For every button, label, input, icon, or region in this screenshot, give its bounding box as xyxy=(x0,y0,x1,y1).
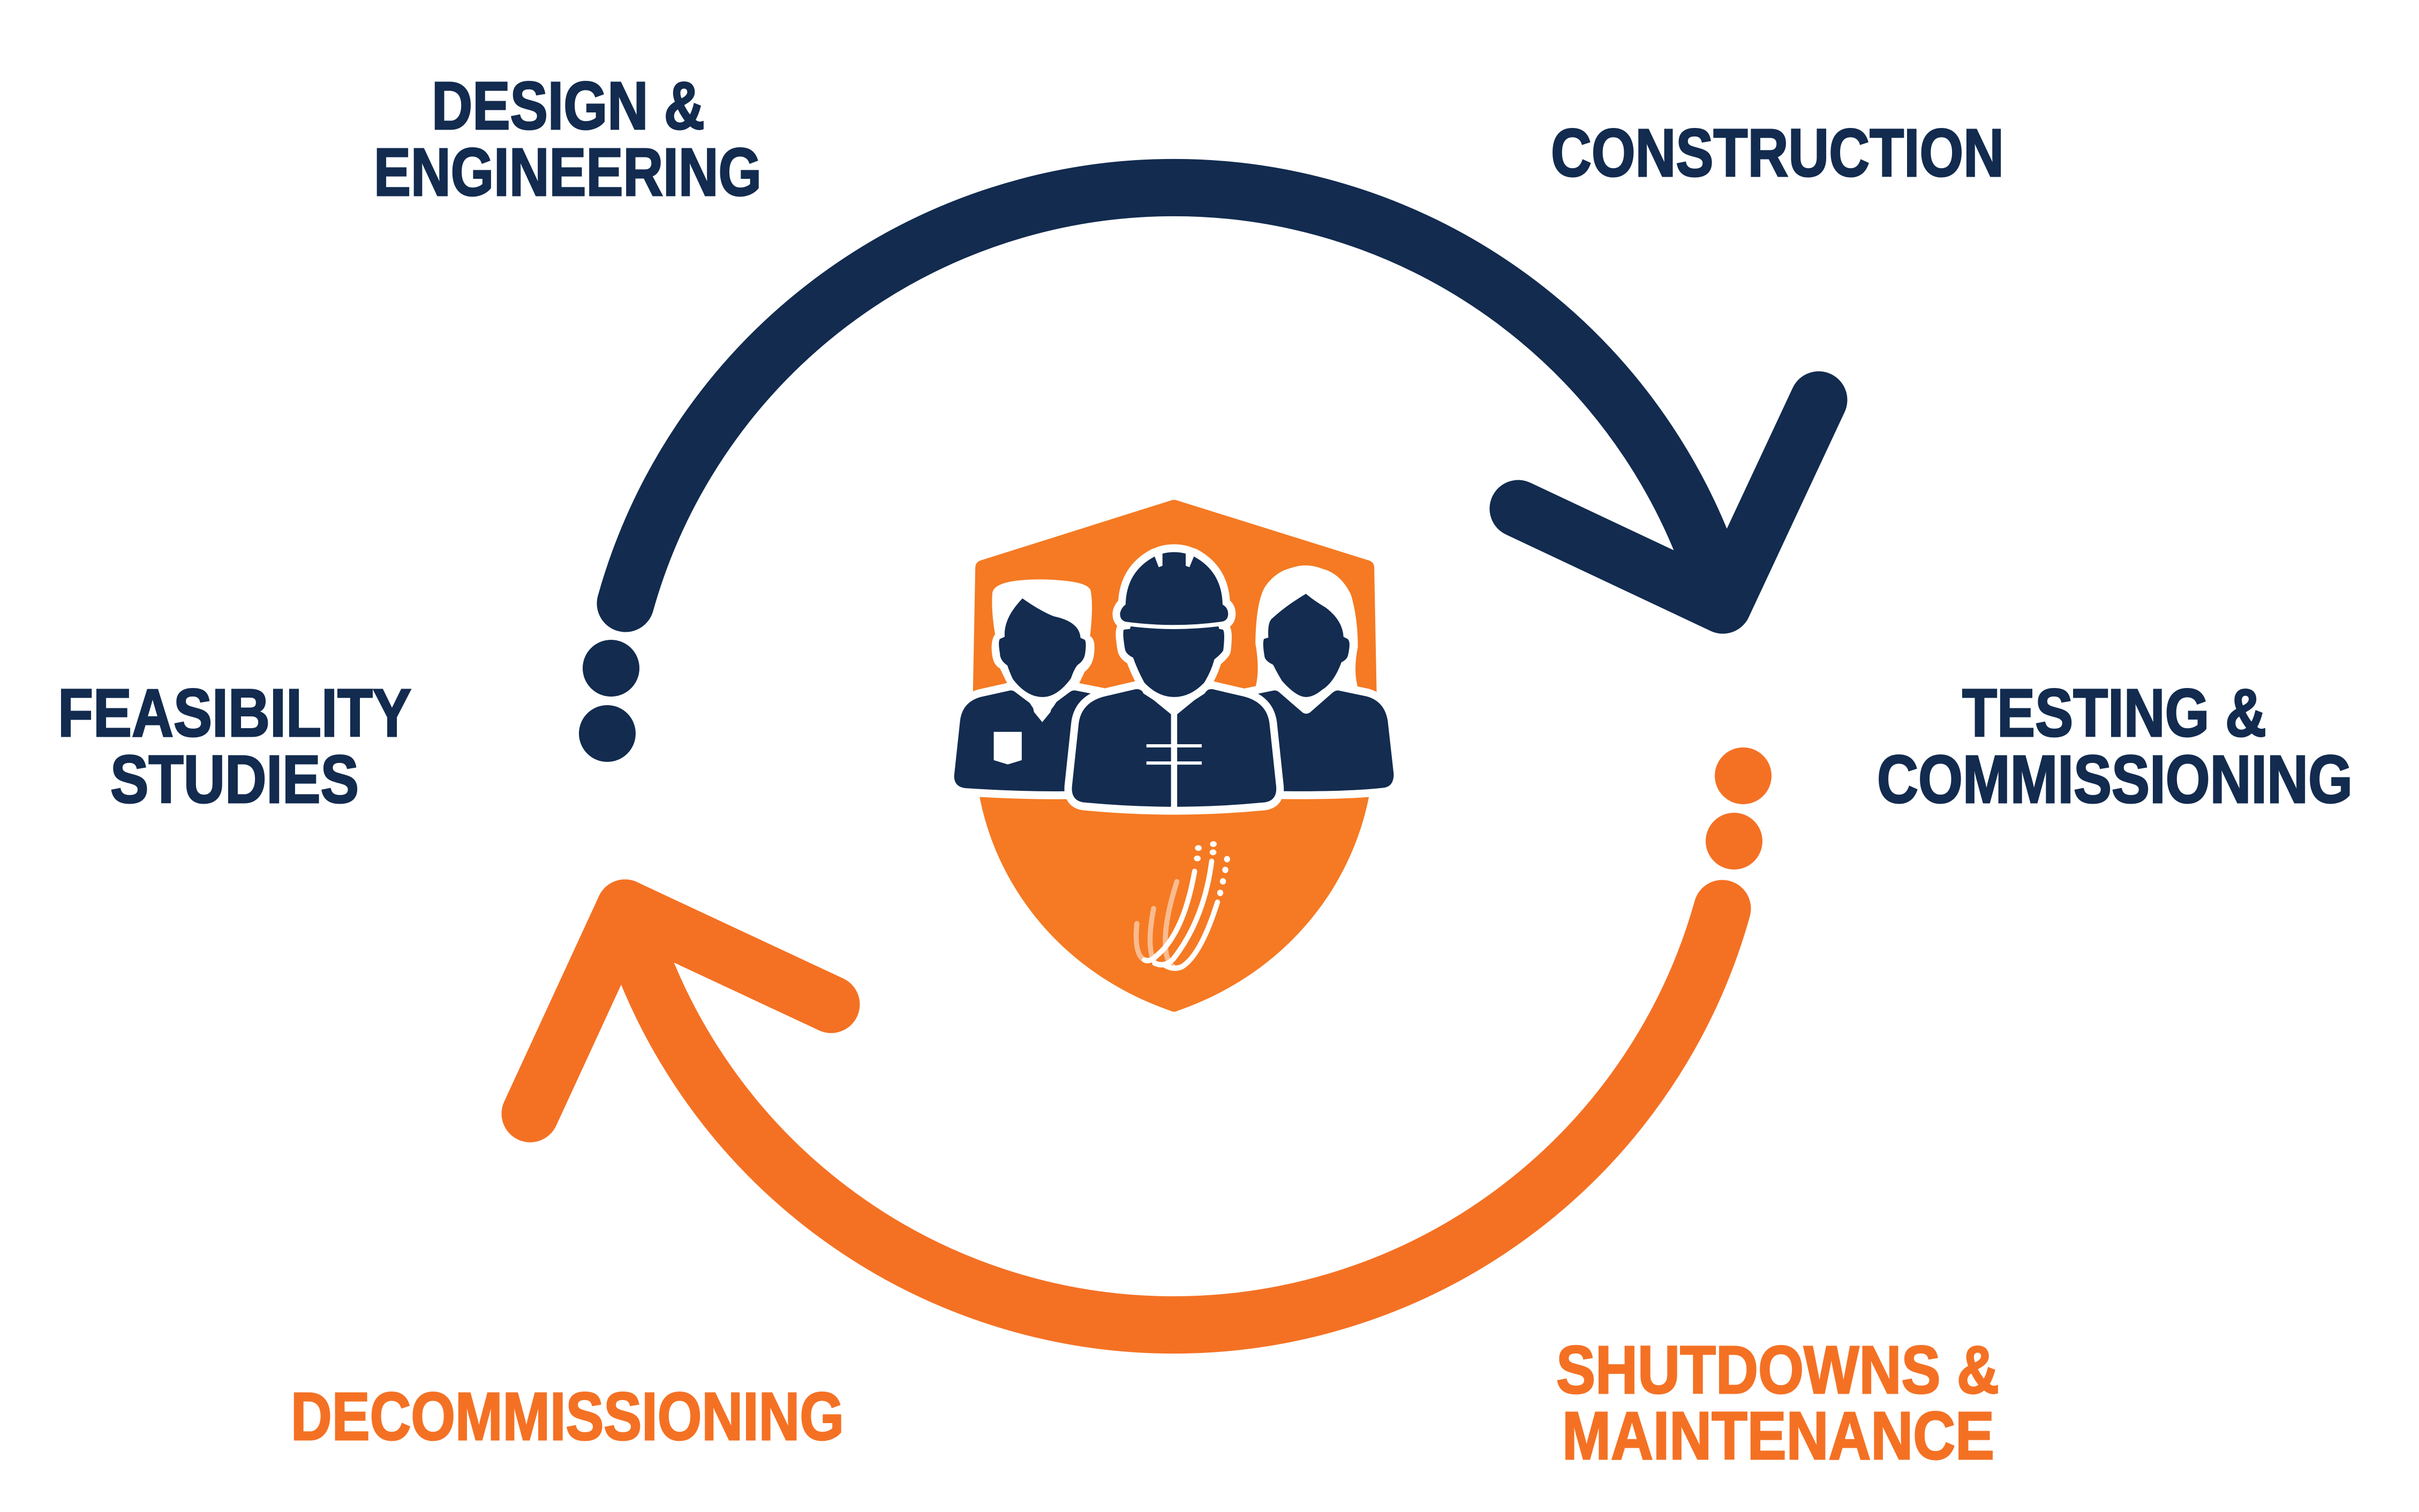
label: Testing & Commissioning xyxy=(1877,675,2353,817)
label: Feasibility Studies: FEASIBILITY xyxy=(58,675,411,751)
label: Shutdowns & Maintenance: MAINTENANCE xyxy=(1562,1398,1994,1473)
central shield emblem with workers xyxy=(954,500,1393,1012)
white halo behind head and hat xyxy=(1120,552,1228,697)
worker: left person xyxy=(954,579,1102,791)
label: Construction: CONSTRUCTION xyxy=(1551,115,2004,191)
arrow: navy upper cycle arrow xyxy=(626,187,1819,605)
navy dots xyxy=(579,640,639,762)
worker: right person xyxy=(1245,565,1393,791)
jacket zip and straps xyxy=(1147,746,1202,763)
label: Feasibility Studies: STUDIES xyxy=(110,742,359,817)
orange dots xyxy=(1706,747,1772,870)
label: Design & Engineering: DESIGN & xyxy=(432,68,705,143)
company swoosh logo xyxy=(1136,841,1230,968)
shield background xyxy=(973,500,1377,1012)
label: Design & Engineering xyxy=(374,68,762,210)
label: Feasibility Studies xyxy=(58,675,411,817)
label: Design & Engineering: ENGINEERING xyxy=(374,134,762,210)
shirt pocket xyxy=(994,732,1022,765)
arrow: orange lower cycle arrow xyxy=(530,908,1722,1325)
label: Shutdowns & Maintenance xyxy=(1556,1332,1999,1473)
label: Testing & Commissioning: TESTING & xyxy=(1962,675,2266,751)
worker: centre person with hard hat xyxy=(1072,552,1276,814)
label: Shutdowns & Maintenance: SHUTDOWNS & xyxy=(1556,1332,1999,1408)
label: Decommissioning: DECOMMISSIONING xyxy=(291,1379,844,1454)
